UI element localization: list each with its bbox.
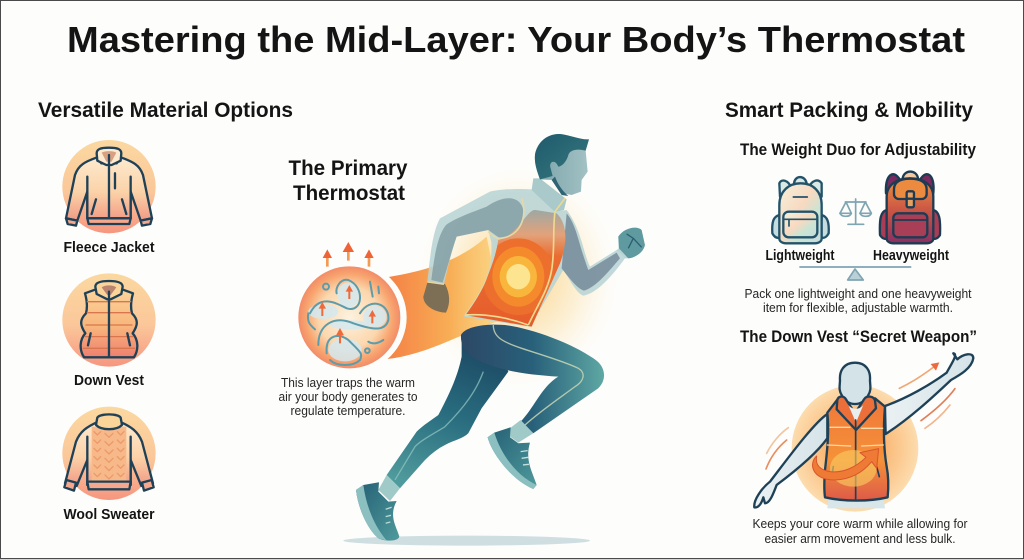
heading: smart packing and mobility: Smart Packing & Mobility <box>725 99 973 122</box>
text: thermostat description <box>278 375 418 418</box>
runner upper body <box>423 134 645 328</box>
icon: trapped warm air circle <box>297 242 407 372</box>
icon: wool sweater <box>62 407 156 500</box>
heat flow band <box>385 237 503 359</box>
icon: down vest <box>62 273 156 367</box>
icon: orange vest <box>824 397 888 501</box>
heading: the weight duo: The Weight Duo for Adjustability <box>740 141 977 159</box>
text: down vest description: easier arm movement and less bulk. <box>764 531 956 546</box>
text: weight duo description <box>744 287 972 315</box>
panel: material options <box>62 140 156 523</box>
label: down vest: Down Vest <box>74 373 144 389</box>
figure head <box>840 363 870 404</box>
warm halo <box>792 385 918 512</box>
panel: primary thermostat runner <box>343 134 645 546</box>
label: wool sweater: Wool Sweater <box>64 507 155 523</box>
icon: heavyweight backpack <box>880 172 940 243</box>
icon: balance seesaw <box>800 267 911 280</box>
ground shadow <box>343 536 590 546</box>
label: lightweight: Lightweight <box>766 248 835 264</box>
icon: fleece jacket <box>62 140 156 233</box>
text: weight duo description: item for flexible, adjustable warmth. <box>763 301 953 315</box>
text: down vest description <box>752 516 968 546</box>
heading: the primary thermostat <box>288 156 408 205</box>
text: thermostat description: air your body generates to <box>278 389 418 404</box>
warm glow <box>418 167 618 387</box>
heading: the primary thermostat: Thermostat <box>293 181 405 205</box>
panel: down vest figure <box>754 353 973 512</box>
text: thermostat description: regulate temperature. <box>290 403 406 418</box>
text: thermostat description: This layer traps the warm <box>281 375 415 390</box>
label: heavyweight: Heavyweight <box>873 248 949 264</box>
title: Mastering the Mid-Layer: Your Body’s Thermostat <box>67 19 965 60</box>
arrow: arm motion <box>766 362 955 469</box>
panel: weight duo graphic <box>772 172 940 280</box>
arrow: core swirl <box>813 449 879 480</box>
heading: down vest secret weapon: The Down Vest “Secret Weapon” <box>740 328 977 346</box>
icon: balance scale <box>840 199 871 224</box>
label: fleece jacket: Fleece Jacket <box>64 240 155 256</box>
heading: versatile material options: Versatile Material Options <box>38 99 293 122</box>
runner legs <box>356 325 604 541</box>
heading: the primary thermostat: The Primary <box>288 156 408 180</box>
figure arms <box>885 353 973 434</box>
text: weight duo description: Pack one lightweight and one heavyweight <box>744 287 972 301</box>
icon: lightweight backpack <box>772 177 829 243</box>
text: down vest description: Keeps your core warm while allowing for <box>752 516 968 531</box>
